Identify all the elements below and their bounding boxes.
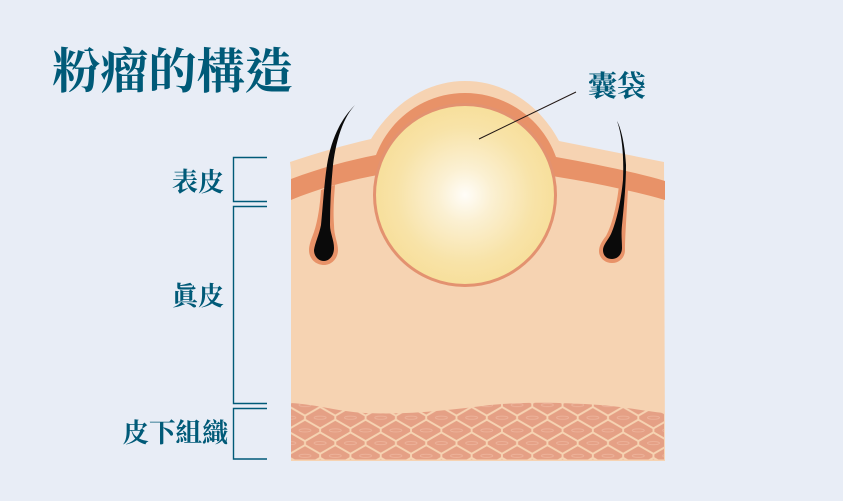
label: epidermis: 表皮 [172,168,224,197]
label: dermis: 眞皮 [172,282,224,311]
bracket: epidermis [234,158,267,202]
bracket: dermis [234,206,267,404]
label: subcutaneous tissue: 皮下組織 [122,418,230,448]
infographic canvas [53,46,665,461]
epidermis pigmented band [291,93,665,200]
leader line to cyst sac [479,92,576,139]
epidermis and dermis body [290,81,665,461]
title: 粉瘤的構造 [52,46,293,99]
hair follicle left [309,105,355,265]
bracket: subcutaneous tissue [234,408,267,459]
label: cyst sac: 囊袋 [588,70,646,103]
skin cross-section diagram [290,81,665,461]
cyst sac [374,104,556,286]
hair follicle right [599,121,628,263]
subcutaneous tissue [291,400,665,461]
